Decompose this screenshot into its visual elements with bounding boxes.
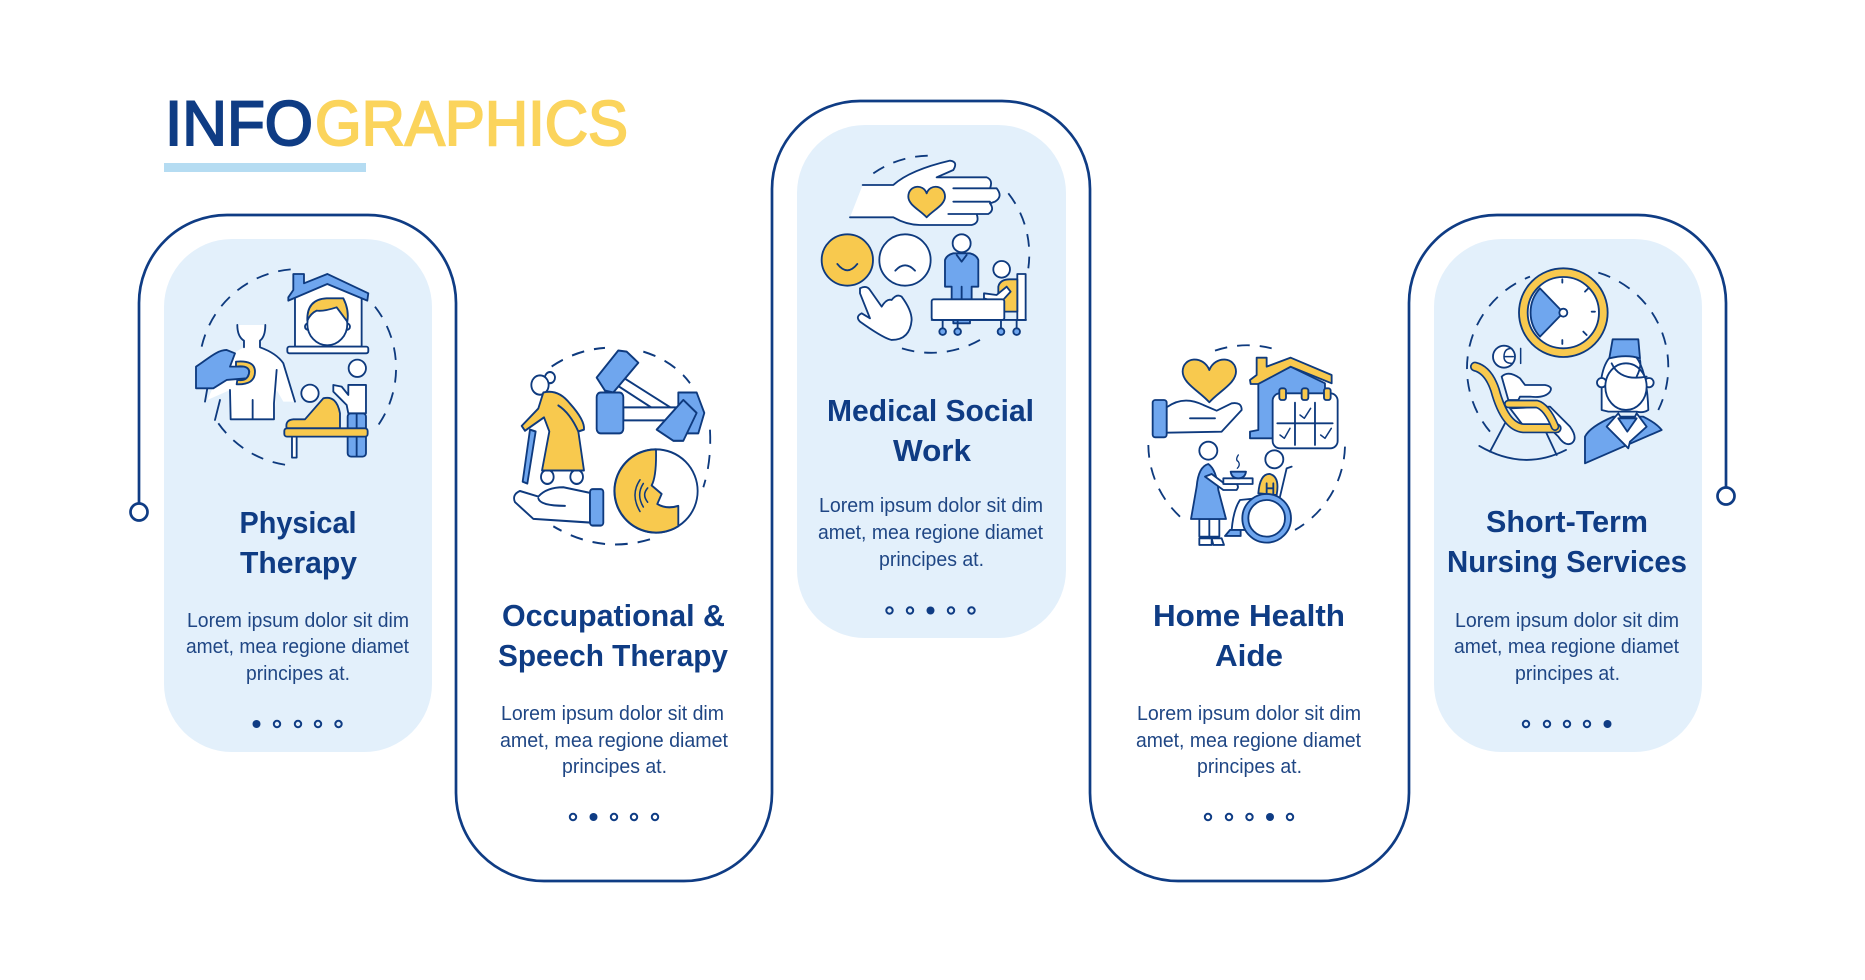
body text: amet, mea regione diamet — [818, 521, 1043, 544]
panel: home health aide — [1136, 345, 1361, 821]
heading: Short-Term — [1486, 504, 1648, 539]
body text: amet, mea regione diamet — [1136, 729, 1361, 752]
body text: amet, mea regione diamet — [186, 635, 409, 658]
body text — [1454, 609, 1679, 685]
title: GRAPHICS — [315, 89, 628, 159]
panel: medical social work — [818, 156, 1043, 614]
pagination dots — [252, 720, 342, 728]
body text: principes at. — [1197, 755, 1302, 778]
title: INFO — [165, 89, 313, 159]
body text: principes at. — [879, 548, 984, 571]
body text — [500, 702, 728, 778]
pagination dots — [886, 606, 975, 614]
body text: Lorem ipsum dolor sit dim — [1455, 609, 1679, 632]
title underline — [164, 163, 366, 172]
heading: Work — [893, 433, 972, 468]
body text: amet, mea regione diamet — [1454, 635, 1679, 658]
icon: short-term nursing services — [1467, 268, 1668, 463]
connecting outline path — [130, 101, 1734, 881]
heading: Physical — [240, 505, 356, 540]
pagination dots — [1523, 720, 1612, 728]
icon: physical therapy — [196, 269, 396, 465]
body text — [818, 494, 1043, 571]
body text — [186, 609, 409, 685]
icon: home health aide — [1148, 345, 1345, 545]
pagination dots — [1205, 813, 1293, 821]
heading: Speech Therapy — [498, 638, 729, 673]
body text: Lorem ipsum dolor sit dim — [819, 494, 1043, 517]
heading — [827, 393, 1034, 468]
icon: medical social work — [822, 156, 1029, 353]
body text: Lorem ipsum dolor sit dim — [501, 702, 724, 725]
body text: principes at. — [562, 755, 667, 778]
icon: occupational and speech therapy — [514, 348, 710, 544]
panel: short-term nursing services — [1447, 268, 1687, 728]
body text — [1136, 702, 1361, 778]
heading — [1153, 598, 1345, 673]
heading: Home Health — [1153, 598, 1345, 633]
heading: Medical Social — [827, 393, 1034, 428]
body text: Lorem ipsum dolor sit dim — [1137, 702, 1361, 725]
heading — [1447, 504, 1687, 579]
heading — [240, 505, 358, 580]
heading — [498, 598, 729, 673]
heading: Nursing Services — [1447, 544, 1687, 579]
heading: Aide — [1215, 638, 1283, 673]
title — [165, 89, 628, 159]
body text: amet, mea regione diamet — [500, 729, 728, 752]
body text: principes at. — [1515, 662, 1620, 685]
heading: Occupational & — [502, 598, 725, 633]
body text: principes at. — [246, 662, 350, 685]
panel: occupational and speech therapy — [498, 348, 729, 821]
panel backgrounds — [164, 125, 1702, 752]
body text: Lorem ipsum dolor sit dim — [187, 609, 409, 632]
pagination dots — [570, 813, 658, 821]
heading: Therapy — [240, 545, 358, 580]
panel: physical therapy — [186, 269, 409, 728]
